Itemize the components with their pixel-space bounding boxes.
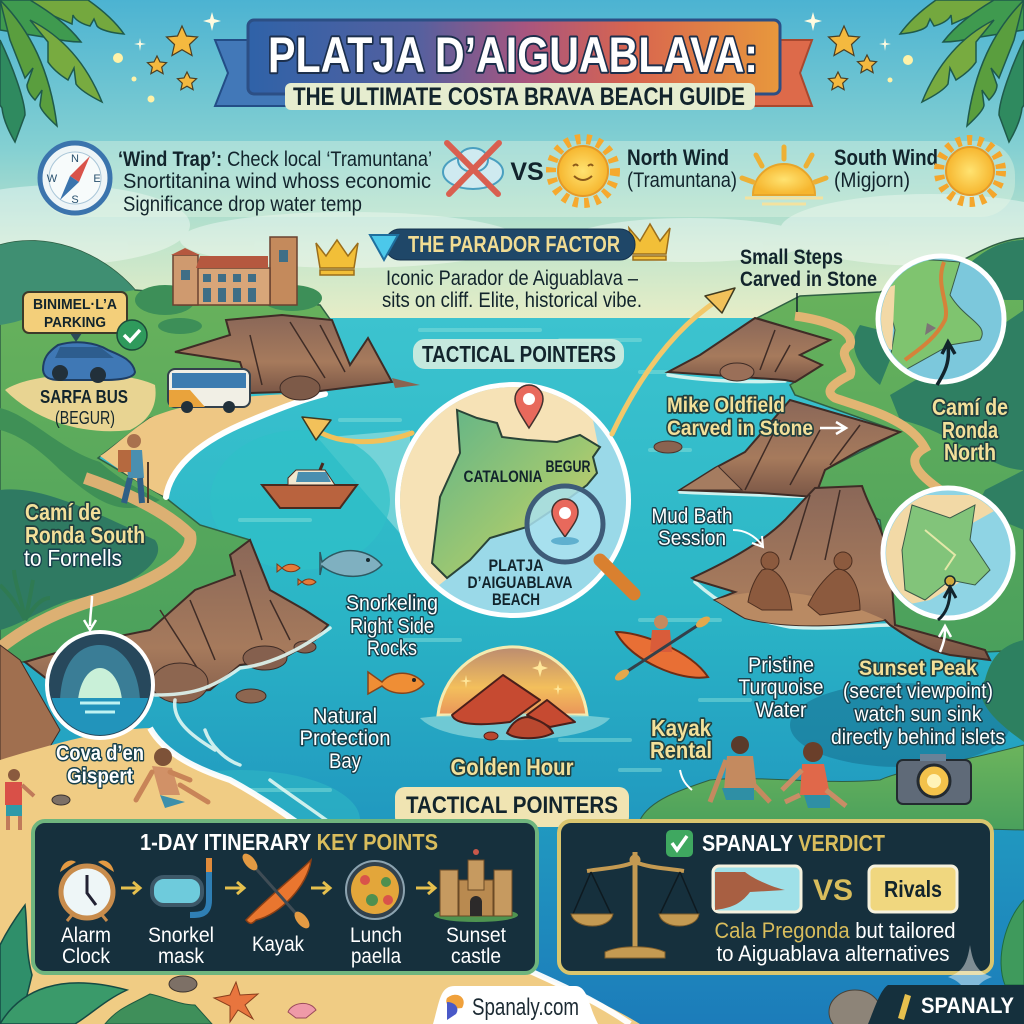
icon: orange fish: [368, 672, 424, 694]
site name: Spanaly.com: [472, 994, 579, 1021]
beach: lower left sand: [0, 728, 640, 1024]
wind trap text: ‘Wind Trap’: Check local ‘Tramuntana’: [118, 148, 432, 171]
vs label: VS: [510, 158, 544, 186]
itinerary labels: Alarm: [61, 924, 111, 947]
title banner: [215, 20, 812, 111]
main title: PLATJA D’AIGUABLAVA:: [268, 27, 758, 83]
itinerary labels: Sunset: [446, 924, 506, 947]
pristine water label: [738, 654, 824, 722]
itinerary labels: [61, 924, 506, 968]
snorkeling label: Rocks: [367, 637, 417, 660]
tactical pointers pill bottom: TACTICAL POINTERS: [406, 792, 618, 819]
icon: sitting person: [136, 748, 208, 808]
black arrow in circle: [938, 587, 956, 620]
small steps label: [740, 246, 877, 291]
icon: beach stone: [169, 976, 197, 992]
icon: sunrise: [742, 147, 826, 204]
pristine water label: Water: [756, 699, 806, 722]
central map: D’AIGUABLAVA: [468, 573, 572, 592]
banner ribbon left: [215, 40, 290, 106]
curved arrow to small steps: [612, 288, 735, 434]
south wind label: South Wind: [834, 145, 938, 170]
wind comparison band: [40, 139, 1015, 217]
sparkle watermark: [948, 945, 992, 1008]
cave label: Cova d’en: [56, 742, 144, 765]
kayak rental label: [650, 715, 712, 763]
palm leaves top left: [0, 0, 124, 142]
arrow 3: [311, 882, 330, 894]
subtitle: THE ULTIMATE COSTA BRAVA BEACH GUIDE: [293, 83, 745, 111]
top right trail map circle: [878, 256, 1004, 382]
mud bath figures: [748, 552, 860, 615]
verdict beach image: [713, 866, 801, 912]
itinerary labels: Kayak: [252, 933, 304, 956]
icon: compass: W: [47, 173, 58, 185]
panel: itinerary: [33, 821, 537, 973]
icon: kayak paddle: [240, 851, 312, 931]
right bushes: [854, 240, 1024, 530]
pristine water label: Turquoise: [738, 676, 824, 699]
icons: small fish: [277, 564, 316, 585]
panel: verdict: [559, 821, 992, 973]
kayak rental label: Rental: [650, 737, 712, 763]
sunset peak label: watch sun sink: [854, 703, 982, 726]
spanaly.com tab: [433, 986, 598, 1024]
sunset peak label: (secret viewpoint): [843, 680, 993, 703]
sea foam lines: [155, 375, 890, 830]
icon: snorkel mask: [152, 858, 209, 915]
snorkeling label: Right Side: [350, 615, 434, 638]
cliff: lower left headland: [0, 540, 328, 762]
map sea: [400, 387, 626, 613]
icon: compass: [40, 143, 110, 213]
itinerary labels: Lunch: [350, 924, 402, 947]
icon: spanaly logo: [446, 995, 464, 1020]
beach sand upper: [100, 394, 325, 497]
camí de ronda south label: [24, 499, 145, 571]
stars right: [804, 12, 913, 90]
camí de ronda north label: Camí de: [932, 394, 1008, 420]
icon: kayaker: [613, 614, 712, 683]
natural protection bay label: [300, 705, 390, 773]
background: sea: [0, 318, 1024, 1024]
icon: green check: [117, 320, 147, 350]
itinerary labels: Clock: [62, 945, 110, 968]
verdict text: Cala Pregonda but tailored: [714, 918, 956, 943]
cliff: right middle headland: [680, 400, 900, 497]
icon: compass: N: [71, 153, 79, 165]
camí de ronda north label: Ronda: [942, 417, 998, 443]
green hill bottom right: [640, 745, 1024, 830]
sunset peak label: Sunset Peak: [859, 657, 977, 680]
trail north: [795, 316, 955, 500]
icon: stone on beach: [52, 795, 70, 805]
central map: BEGUR: [546, 457, 590, 476]
icon: bus: [168, 369, 250, 413]
itinerary labels: castle: [451, 945, 501, 968]
icon: hiker: [118, 434, 148, 503]
mike oldfield label: Carved in Stone: [667, 417, 813, 440]
icon: brand mark: [898, 994, 911, 1020]
beach foam upper: [166, 394, 325, 497]
background: sky: [0, 0, 1024, 330]
cave label: [56, 742, 144, 788]
lower right map circle: [883, 488, 1013, 618]
arrow 1: [121, 882, 140, 894]
camí de ronda north label: North: [944, 439, 996, 465]
parking sign: [23, 292, 127, 342]
sea rocks: [654, 441, 682, 453]
icon: seated couple: [710, 736, 846, 808]
snorkeling label: Snorkeling: [346, 592, 438, 615]
parking sand patch: [5, 374, 156, 431]
verdict text: [714, 918, 956, 966]
south wind label: [834, 145, 938, 192]
rivals card: [869, 866, 957, 912]
banner ribbon right: [735, 40, 812, 106]
icon: sun: [939, 140, 1001, 202]
camí de ronda south label: Ronda South: [25, 522, 145, 548]
parador description: Iconic Parador de Aiguablava –: [386, 267, 638, 290]
parking sign: PARKING: [44, 314, 106, 331]
north wind label: [627, 145, 737, 192]
spanaly brand badge: [868, 985, 1024, 1024]
icon: scales: [571, 852, 699, 958]
arrow to carved stone: [820, 422, 846, 434]
band background: [40, 141, 1015, 217]
arrow from north label: [937, 342, 955, 385]
tactical pointers pill bottom: [395, 787, 629, 827]
arrow from map to left beach: [302, 417, 412, 442]
parador description: [382, 267, 642, 312]
arrow from kayak rental: [680, 770, 692, 790]
arrow to lower circle: [939, 626, 951, 652]
trail south: [0, 478, 190, 648]
background: sea shading: [120, 430, 1010, 870]
subtitle pill: [285, 83, 755, 110]
icon: diamond: [370, 235, 398, 260]
sunset peak label: directly behind islets: [831, 726, 1005, 749]
north wind label: North Wind: [627, 145, 729, 170]
mike oldfield label: Mike Oldfield: [667, 394, 785, 417]
itinerary labels: paella: [351, 945, 401, 968]
icon: bush: [105, 994, 212, 1024]
bus label: (BEGUR): [55, 408, 115, 428]
central map: [395, 380, 635, 620]
map labels: CATALONIA: [464, 467, 542, 486]
central map: BEACH: [492, 590, 540, 609]
cliff: upper left headland: [175, 315, 420, 400]
catalonia shape: [432, 410, 600, 578]
dark bush right: [981, 640, 1024, 742]
icon: crown left: [316, 240, 358, 275]
parador pill heading: [385, 229, 635, 260]
sunset peak label: [831, 657, 1005, 749]
camí de ronda south label: to Fornells: [24, 545, 122, 571]
leaves bottom right: [1001, 900, 1024, 985]
background: clouds: [0, 185, 1024, 268]
icon: grey fish: [320, 551, 382, 576]
decorative leaves left: [0, 905, 127, 1024]
icon: car: [43, 342, 135, 383]
snorkeling label: [346, 592, 438, 660]
mud bath label: [652, 505, 732, 550]
cave circle icon: [45, 632, 155, 740]
icon: camera: [897, 754, 971, 804]
banner body: [248, 20, 780, 94]
pristine water label: Pristine: [748, 654, 814, 677]
wind trap text: Snortitanina wind whoss economic: [123, 170, 431, 193]
arrow 2: [225, 882, 244, 894]
natural protection bay label: Natural: [313, 705, 377, 728]
cliff: right lower rocks: [692, 486, 990, 660]
golden hour sunset: [420, 647, 610, 740]
icon: verdict check: [666, 830, 693, 857]
kayak rental label: Kayak: [651, 715, 711, 741]
mud bath label: Session: [658, 527, 726, 550]
icon: standing child: [5, 769, 34, 830]
natural protection bay label: Bay: [329, 750, 361, 773]
parking sign: BINIMEL·L’A: [33, 296, 117, 313]
camí de ronda north label: [932, 394, 1008, 465]
landscape: right land: [640, 238, 1024, 830]
icon: plant: [0, 570, 50, 620]
bus label: SARFA BUS: [40, 387, 128, 407]
rock bottom right: [829, 990, 881, 1024]
verdict vs: VS: [813, 874, 853, 907]
golden hour label: Golden Hour: [450, 754, 574, 780]
icon: starfish: [214, 982, 258, 1022]
map pin top: [515, 385, 543, 428]
rivals card: Rivals: [884, 876, 942, 902]
icon: crossed cloud: [443, 143, 503, 194]
verdict title: SPANALY VERDICT: [702, 830, 885, 856]
mike oldfield label: [667, 394, 813, 440]
mud bath label: Mud Bath: [652, 505, 732, 528]
icon: alarm clock: [60, 860, 114, 921]
itinerary labels: mask: [158, 945, 204, 968]
wind trap text: [118, 148, 432, 216]
background: sea waves: [240, 330, 750, 790]
small steps label: Small Steps: [740, 246, 843, 269]
icon: compass: E: [93, 173, 101, 185]
tactical pointers pill top: TACTICAL POINTERS: [422, 341, 616, 367]
map land cream: [400, 387, 598, 586]
cave label: Gispert: [67, 765, 133, 788]
leader to steps: [796, 293, 798, 312]
south wind label: (Migjorn): [834, 169, 910, 192]
central map: PLATJA: [488, 556, 544, 575]
icon: crown right: [629, 224, 670, 260]
icon: compass: S: [71, 194, 79, 206]
arrow to cave: [84, 596, 96, 630]
parador pill heading: THE PARADOR FACTOR: [408, 231, 620, 257]
cliff: right upper islet: [668, 318, 830, 382]
north wind label: (Tramuntana): [627, 169, 737, 192]
itinerary title: 1-DAY ITINERARY KEY POINTS: [140, 829, 438, 855]
icon: smiling sun: [551, 139, 615, 203]
magnifying glass: [527, 486, 634, 594]
wind trap text: Significance drop water temp: [123, 193, 362, 216]
palm leaves top right: [900, 0, 1024, 142]
arrow to mud bath: [733, 530, 763, 547]
brand name: SPANALY: [921, 993, 1014, 1018]
verdict text: to Aiguablava alternatives: [716, 941, 950, 966]
icon: parador building: [171, 237, 297, 305]
landscape: left land: [0, 241, 332, 662]
camí de ronda south label: Camí de: [25, 499, 101, 525]
bus label: [40, 387, 128, 428]
itinerary labels: Snorkel: [148, 924, 214, 947]
natural protection bay label: Protection: [300, 727, 390, 750]
icon: paella: [346, 861, 404, 919]
stars left: [113, 12, 221, 102]
icon: shell: [288, 1003, 316, 1018]
icon: boat: [262, 463, 357, 508]
parador description: sits on cliff. Elite, historical vibe.: [382, 289, 642, 312]
arrow 4: [416, 882, 435, 894]
small steps label: Carved in Stone: [740, 268, 877, 291]
icon: castle: [434, 849, 518, 922]
